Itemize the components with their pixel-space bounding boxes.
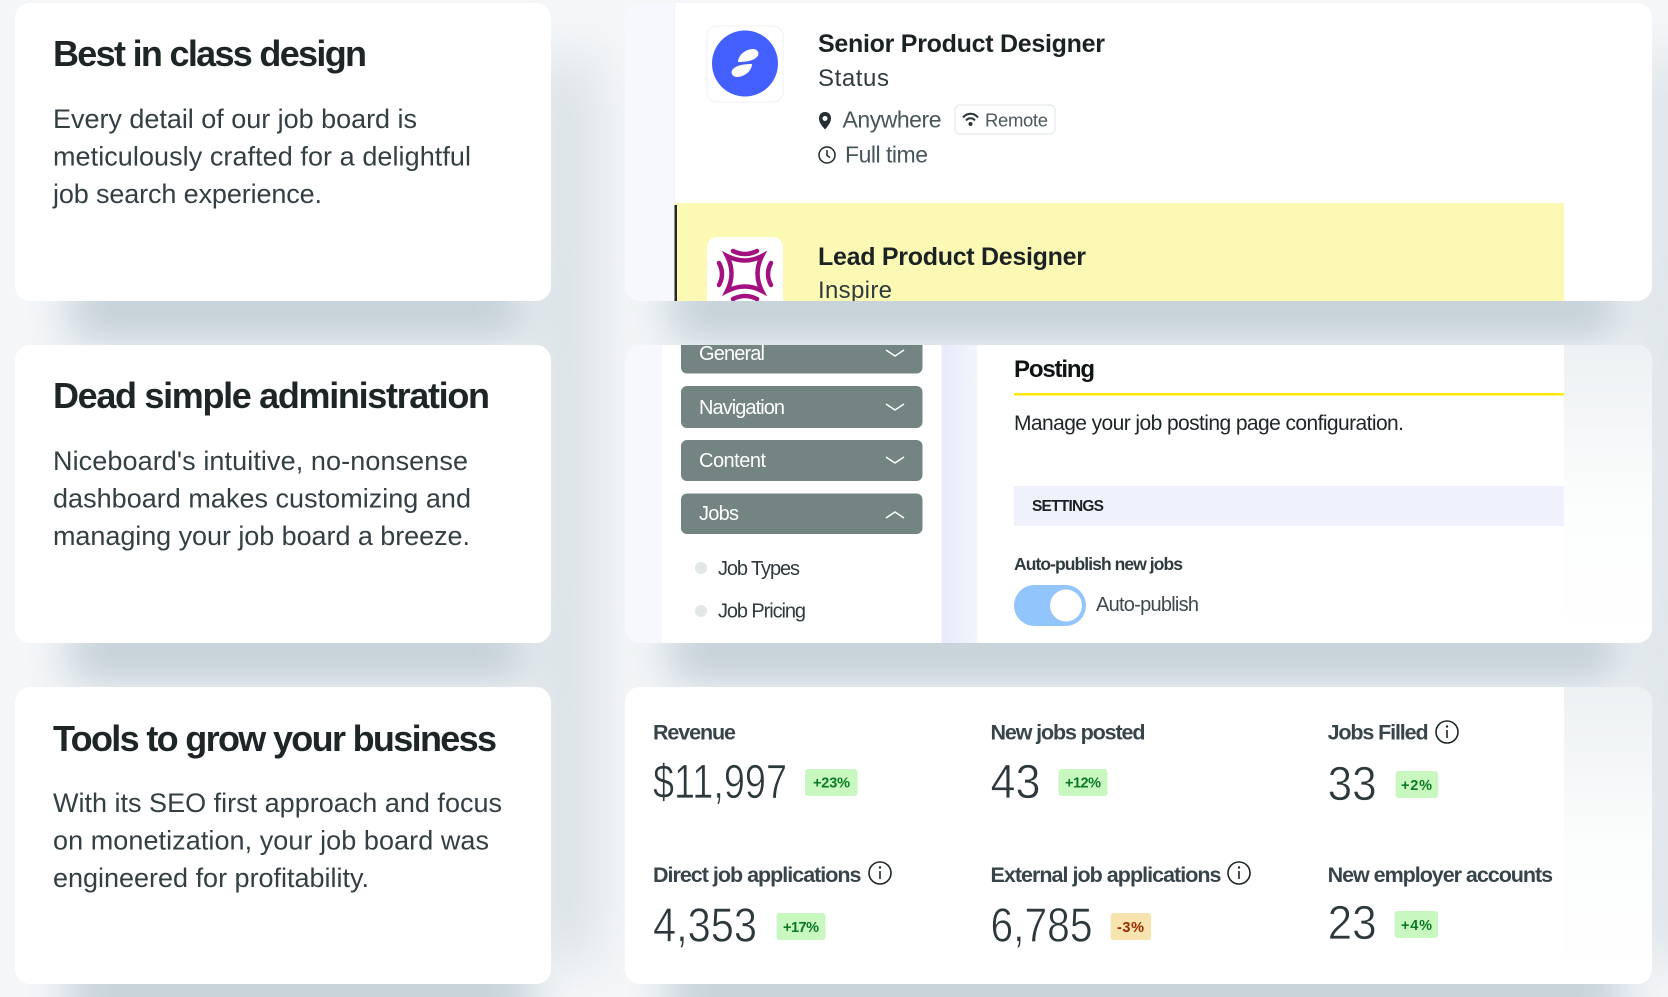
stat: external job applications: External job applications [990, 863, 1222, 887]
icon: inspire logo [707, 237, 783, 301]
body text: dead simple administration: managing your job board a breeze. [53, 521, 470, 551]
stat: revenue: +23% [813, 776, 850, 792]
stat: direct job applications: +17% [783, 920, 819, 936]
badge: remote [955, 105, 1055, 134]
body text: dead simple administration: dashboard makes customizing and [53, 484, 471, 514]
job card: lead product designer (highlighted): Inspire [818, 277, 892, 304]
body text: best in class design: job search experience. [52, 179, 322, 209]
stat: new jobs posted: +12% [1065, 776, 1101, 792]
heading: dead simple administration: Dead simple administration [53, 375, 490, 416]
stat: new jobs posted: New jobs posted [990, 720, 1146, 744]
heading: tools to grow your business: Tools to grow your business [53, 718, 497, 759]
panel: tools to grow your business text [15, 687, 551, 984]
badge: remote: Remote [985, 110, 1048, 130]
stat: new employer accounts: New employer accounts [1328, 863, 1553, 887]
job card: lead product designer (highlighted) [674, 203, 1564, 301]
body text: dead simple administration: Niceboard's intuitive, no-nonsense [53, 446, 468, 476]
stat: revenue: Revenue [653, 720, 736, 744]
icon: location pin [819, 112, 831, 130]
menu item: navigation [681, 386, 922, 428]
menu item: general [681, 345, 922, 374]
job card: senior product designer: Status [818, 65, 889, 92]
heading: best in class design: Best in class design [53, 33, 367, 74]
stat: new employer accounts: +4% [1401, 918, 1432, 934]
icon: status logo [707, 26, 783, 102]
menu item: content [681, 440, 922, 481]
toggle switch [1014, 585, 1086, 626]
icon: info [1436, 721, 1458, 743]
panel: best in class design text [15, 3, 551, 301]
posting settings content: Auto-publish [1096, 594, 1199, 616]
stat: new jobs posted [992, 724, 1144, 798]
submenu: job pricing: Job Pricing [718, 600, 806, 622]
posting settings content: Auto-publish new jobs [1014, 554, 1183, 574]
stat: jobs filled: 33 [1328, 758, 1377, 811]
body text: dead simple administration [53, 446, 471, 551]
stat: new jobs posted: 43 [990, 756, 1040, 809]
submenu: job types: Job Types [718, 558, 800, 580]
job card: senior product designer: Full time [845, 142, 928, 168]
menu item: jobs: Jobs [699, 503, 739, 525]
job card: senior product designer [707, 26, 1105, 168]
stat: direct job applications: 4,353 [653, 900, 757, 952]
panel: dead simple administration text [15, 345, 551, 643]
stat: new employer accounts [1329, 866, 1552, 940]
stat: external job applications [990, 862, 1250, 952]
body text: best in class design [52, 104, 471, 209]
settings band [1014, 486, 1564, 526]
menu item: jobs [681, 494, 922, 534]
body text: tools to grow your business: on monetization, your job board was [53, 826, 489, 856]
icon: info [1228, 862, 1250, 884]
admin sidebar menu [681, 330, 922, 622]
posting settings content: Manage your job posting page configuration. [1014, 412, 1404, 435]
settings band: SETTINGS [1032, 498, 1104, 515]
stat: external job applications: -3% [1117, 920, 1144, 936]
icon: info [869, 862, 891, 884]
stat: revenue [654, 725, 858, 804]
menu item: navigation: Navigation [699, 397, 785, 419]
posting settings content [1014, 356, 1564, 626]
job card: senior product designer: Anywhere [842, 106, 942, 132]
menu item: general: General [699, 343, 765, 365]
submenu: job types [695, 560, 800, 579]
stat: jobs filled: Jobs Filled [1328, 720, 1429, 744]
panel: job listings preview [625, 3, 1652, 313]
posting settings content: Posting [1014, 356, 1095, 383]
panel: analytics stats [625, 687, 1652, 984]
stat: jobs filled [1328, 720, 1459, 800]
stat: jobs filled: +2% [1401, 778, 1432, 794]
panel: admin dashboard preview [625, 330, 1652, 643]
stat: revenue: $11,997 [653, 756, 787, 809]
body text: tools to grow your business [53, 788, 502, 893]
stat: new employer accounts: 23 [1328, 897, 1377, 950]
stat: direct job applications [653, 862, 891, 952]
stat: external job applications: 6,785 [990, 900, 1092, 952]
body text: tools to grow your business: With its SEO first approach and focus [53, 788, 502, 818]
job card: lead product designer (highlighted): Lead Product Designer [818, 243, 1086, 271]
menu item: content: Content [699, 450, 766, 472]
body text: best in class design: Every detail of our job board is [53, 104, 417, 134]
icon: clock [819, 147, 835, 163]
job card: senior product designer: Senior Product Designer [818, 30, 1105, 58]
submenu: job pricing [695, 602, 805, 622]
body text: best in class design: meticulously crafted for a delightful [53, 142, 471, 172]
stat: direct job applications: Direct job applications [653, 863, 862, 887]
body text: tools to grow your business: engineered for profitability. [53, 863, 369, 893]
